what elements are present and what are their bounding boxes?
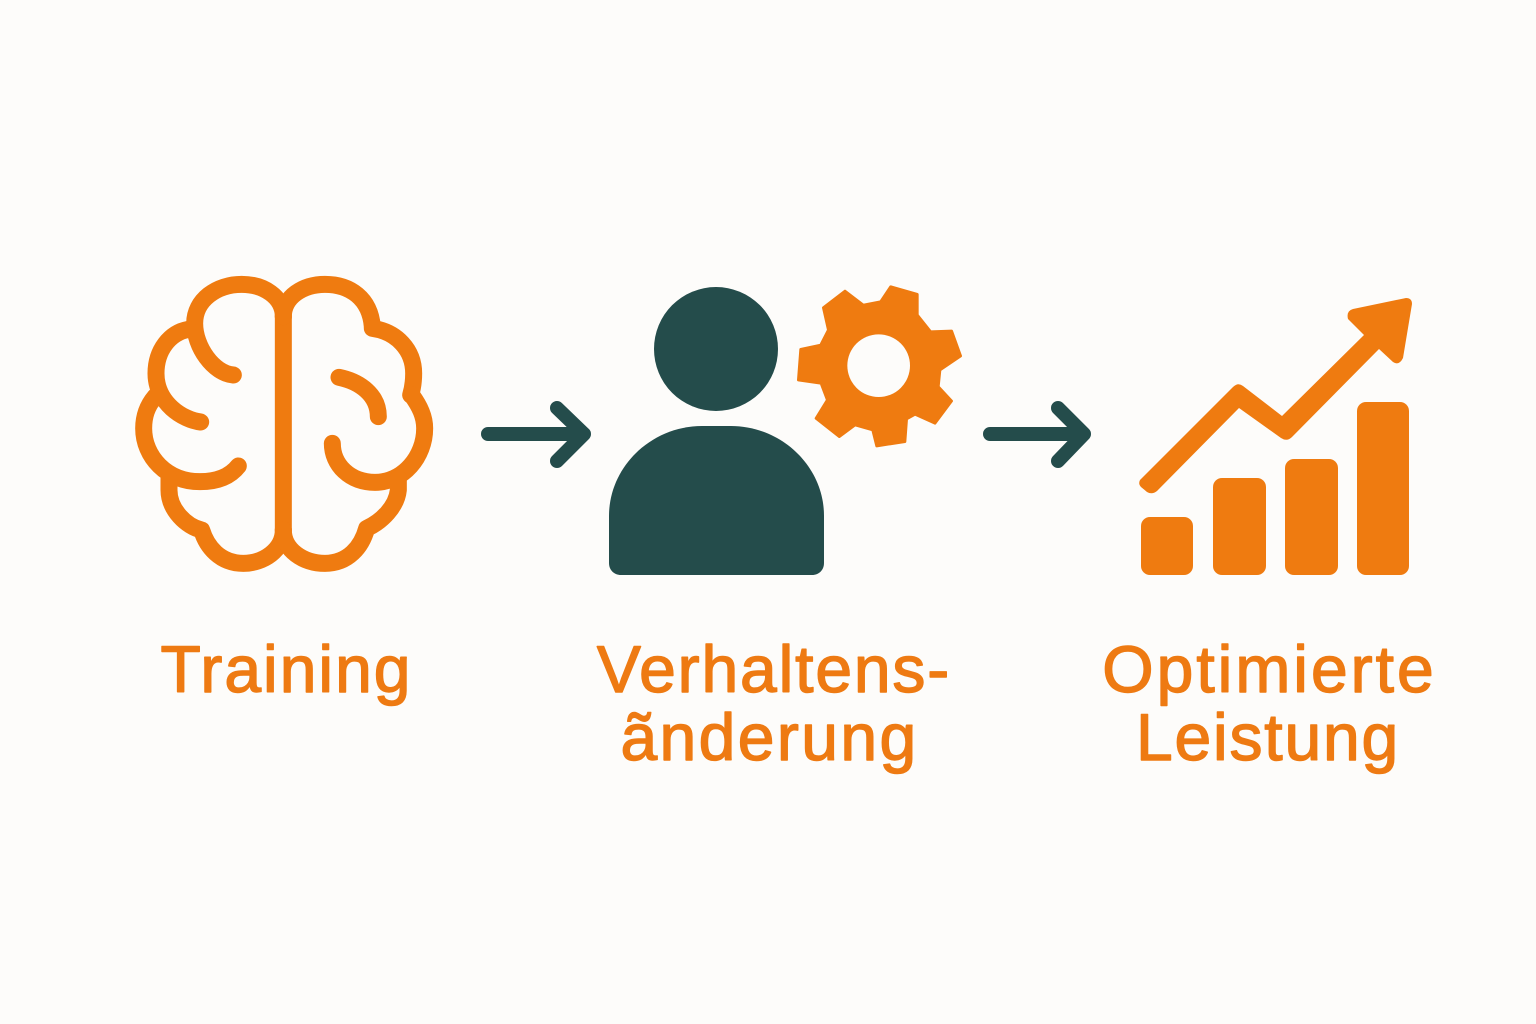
icon: rising bar chart — [1139, 298, 1412, 575]
label: Optimierte Leistung: Optimierte — [1102, 632, 1437, 706]
label: Verhaltensänderung: Verhaltens- — [597, 632, 951, 706]
label: Verhaltensänderung — [597, 632, 951, 774]
label: Training: Training — [160, 632, 412, 706]
icon: gear — [798, 287, 961, 446]
arrow: training to behaviour — [488, 408, 584, 461]
arrow: behaviour to performance — [990, 408, 1084, 461]
label: Verhaltensänderung: ãnderung — [620, 700, 919, 774]
icon: brain — [144, 284, 425, 563]
label: Optimierte Leistung: Leistung — [1136, 700, 1400, 774]
label: Optimierte Leistung — [1102, 632, 1437, 774]
icon: person — [609, 287, 824, 575]
